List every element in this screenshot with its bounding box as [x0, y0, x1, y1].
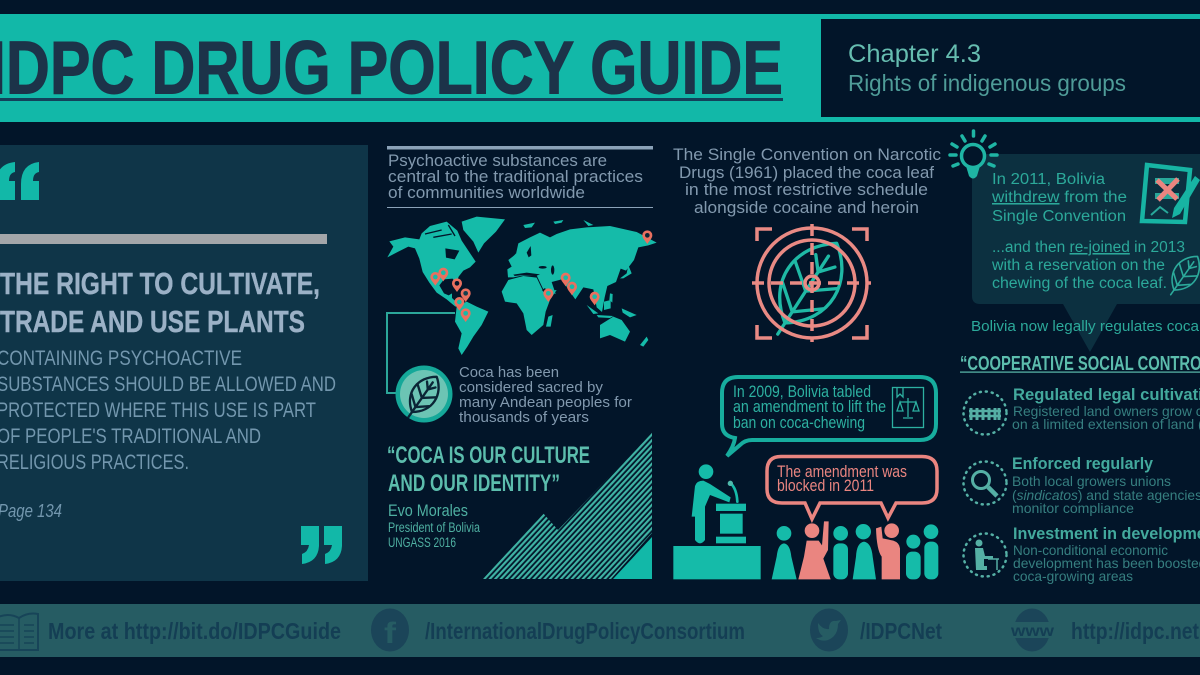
quote: Evo Morales	[387, 442, 590, 550]
quote body: RELIGIOUS PRACTICES.	[0, 451, 189, 474]
quote heading: TRADE AND USE PLANTS	[0, 304, 305, 339]
title: IDPC DRUG POLICY GUIDE	[0, 26, 783, 110]
icon: small leaf	[1161, 250, 1200, 301]
item: enforced regularly	[964, 455, 1200, 516]
text: withdrew: ...and then re-joined in 2013	[992, 239, 1185, 256]
heading: psychoactive substances: of communities worldwide	[388, 184, 585, 202]
text: coca sacred: Coca has been	[459, 364, 559, 381]
text: withdrew: with a reservation on the	[991, 257, 1165, 274]
text: withdrew: chewing of the coca leaf.	[992, 275, 1167, 292]
text: single convention	[673, 146, 941, 217]
speech bubble: 2009 amendment: ban on coca-chewing	[733, 413, 865, 432]
text: single convention: The Single Convention on Narcotic	[673, 146, 941, 164]
header band	[0, 14, 1200, 122]
chapter box	[821, 19, 1200, 117]
speech bubble: blocked: blocked in 2011	[777, 476, 874, 495]
icon: facebook: f	[384, 617, 397, 650]
icon: coca leaf target	[752, 224, 871, 349]
text: coca sacred: thousands of years	[459, 409, 589, 426]
quote: Evo Morales: President of Bolivia	[388, 520, 480, 535]
text: withdrew: Single Convention	[992, 208, 1126, 225]
footer band	[0, 604, 1200, 657]
panel: quote	[0, 145, 368, 581]
item: enforced regularly: Both local growers unions	[1012, 473, 1171, 489]
speech bubble: 2009 amendment: an amendment to lift the	[733, 397, 886, 416]
speech bubble: 2009 amendment	[722, 377, 936, 456]
icon: crossed out document	[1142, 165, 1200, 222]
icon: opening quote mark	[0, 162, 39, 200]
quote heading	[0, 266, 320, 339]
item: investment in development: coca-growing areas	[1013, 568, 1133, 584]
icon: fence	[964, 392, 1006, 434]
item: regulated legal cultivation	[964, 385, 1200, 434]
icon: web	[1010, 608, 1055, 652]
quote heading: THE RIGHT TO CULTIVATE,	[0, 266, 320, 301]
item: enforced regularly: (sindicatos) and state agencies	[1012, 487, 1200, 503]
text: coca sacred: many Andean peoples for	[459, 394, 632, 411]
quote body: CONTAINING PSYCHOACTIVE	[0, 347, 242, 370]
text: withdrew	[991, 171, 1185, 292]
quote: Evo Morales: “COCA IS OUR CULTURE	[387, 442, 590, 469]
panel: Bolivia withdrawal	[950, 131, 1200, 352]
quote body: PROTECTED WHERE THIS USE IS PART	[0, 399, 316, 422]
quote body: OF PEOPLE'S TRADITIONAL AND	[0, 425, 261, 448]
icon: speaker at podium	[673, 464, 761, 579]
quote: Evo Morales: AND OUR IDENTITY”	[388, 470, 560, 497]
world map	[387, 217, 657, 355]
icon: closing quote mark	[301, 526, 342, 564]
quote body: SUBSTANCES SHOULD BE ALLOWED AND	[0, 373, 336, 396]
map location pins	[430, 230, 652, 322]
text: facebook handle: /InternationalDrugPolicyConsortium	[425, 618, 745, 644]
icon: crowd	[772, 521, 938, 579]
grey rule	[0, 234, 327, 244]
text: single convention: in the most restrictive schedule	[685, 181, 928, 199]
speech bubble: blocked	[767, 456, 937, 519]
text: coca sacred	[459, 364, 632, 426]
speech bubble: 2009 amendment: In 2009, Bolivia tabled	[733, 382, 871, 401]
item: enforced regularly: monitor compliance	[1012, 500, 1134, 516]
page reference: Page 134	[0, 501, 62, 521]
quote body	[0, 347, 336, 474]
text: twitter handle: /IDPCNet	[860, 618, 942, 644]
item: investment in development: Non-conditional economic	[1013, 542, 1168, 558]
title underline	[0, 98, 783, 101]
icon: web: www	[1010, 623, 1055, 640]
icon: light bulb	[950, 131, 997, 178]
icon: twitter	[810, 608, 848, 652]
icon: open book	[0, 614, 38, 650]
item: investment in development	[964, 524, 1200, 584]
heading: psychoactive substances: central to the traditional practices	[388, 168, 643, 186]
graphic: hatched mountains	[483, 432, 652, 579]
quote: Evo Morales: Evo Morales	[388, 501, 468, 520]
heading: psychoactive substances: Psychoactive substances are	[388, 152, 607, 170]
text: withdrew: withdrew from the	[991, 189, 1127, 206]
heading: psychoactive substances	[387, 146, 653, 208]
item: enforced regularly: Enforced regularly	[1012, 455, 1154, 473]
quote: Evo Morales: UNGASS 2016	[388, 535, 456, 550]
icon: law book	[892, 387, 924, 428]
text: more at: More at http://bit.do/IDPCGuide	[48, 618, 341, 644]
speech bubble: blocked: The amendment was	[777, 462, 907, 481]
icon: magnifier	[964, 462, 1006, 504]
text: coca sacred: considered sacred by	[459, 379, 603, 396]
chapter box: Chapter 4.3	[848, 40, 981, 68]
chapter box: Rights of indigenous groups	[848, 70, 1126, 96]
text: withdrew: In 2011, Bolivia	[992, 171, 1105, 188]
text: single convention: alongside cocaine and heroin	[694, 199, 919, 217]
icon: facebook	[371, 608, 409, 652]
icon: person at desk	[964, 534, 1006, 576]
text: single convention: Drugs (1961) placed the coca leaf	[679, 164, 934, 182]
text: regulates coca: Bolivia now legally regulates coca	[971, 318, 1200, 335]
connector line from map to coca icon	[387, 313, 455, 393]
icon: coca leaf circle	[396, 366, 452, 424]
